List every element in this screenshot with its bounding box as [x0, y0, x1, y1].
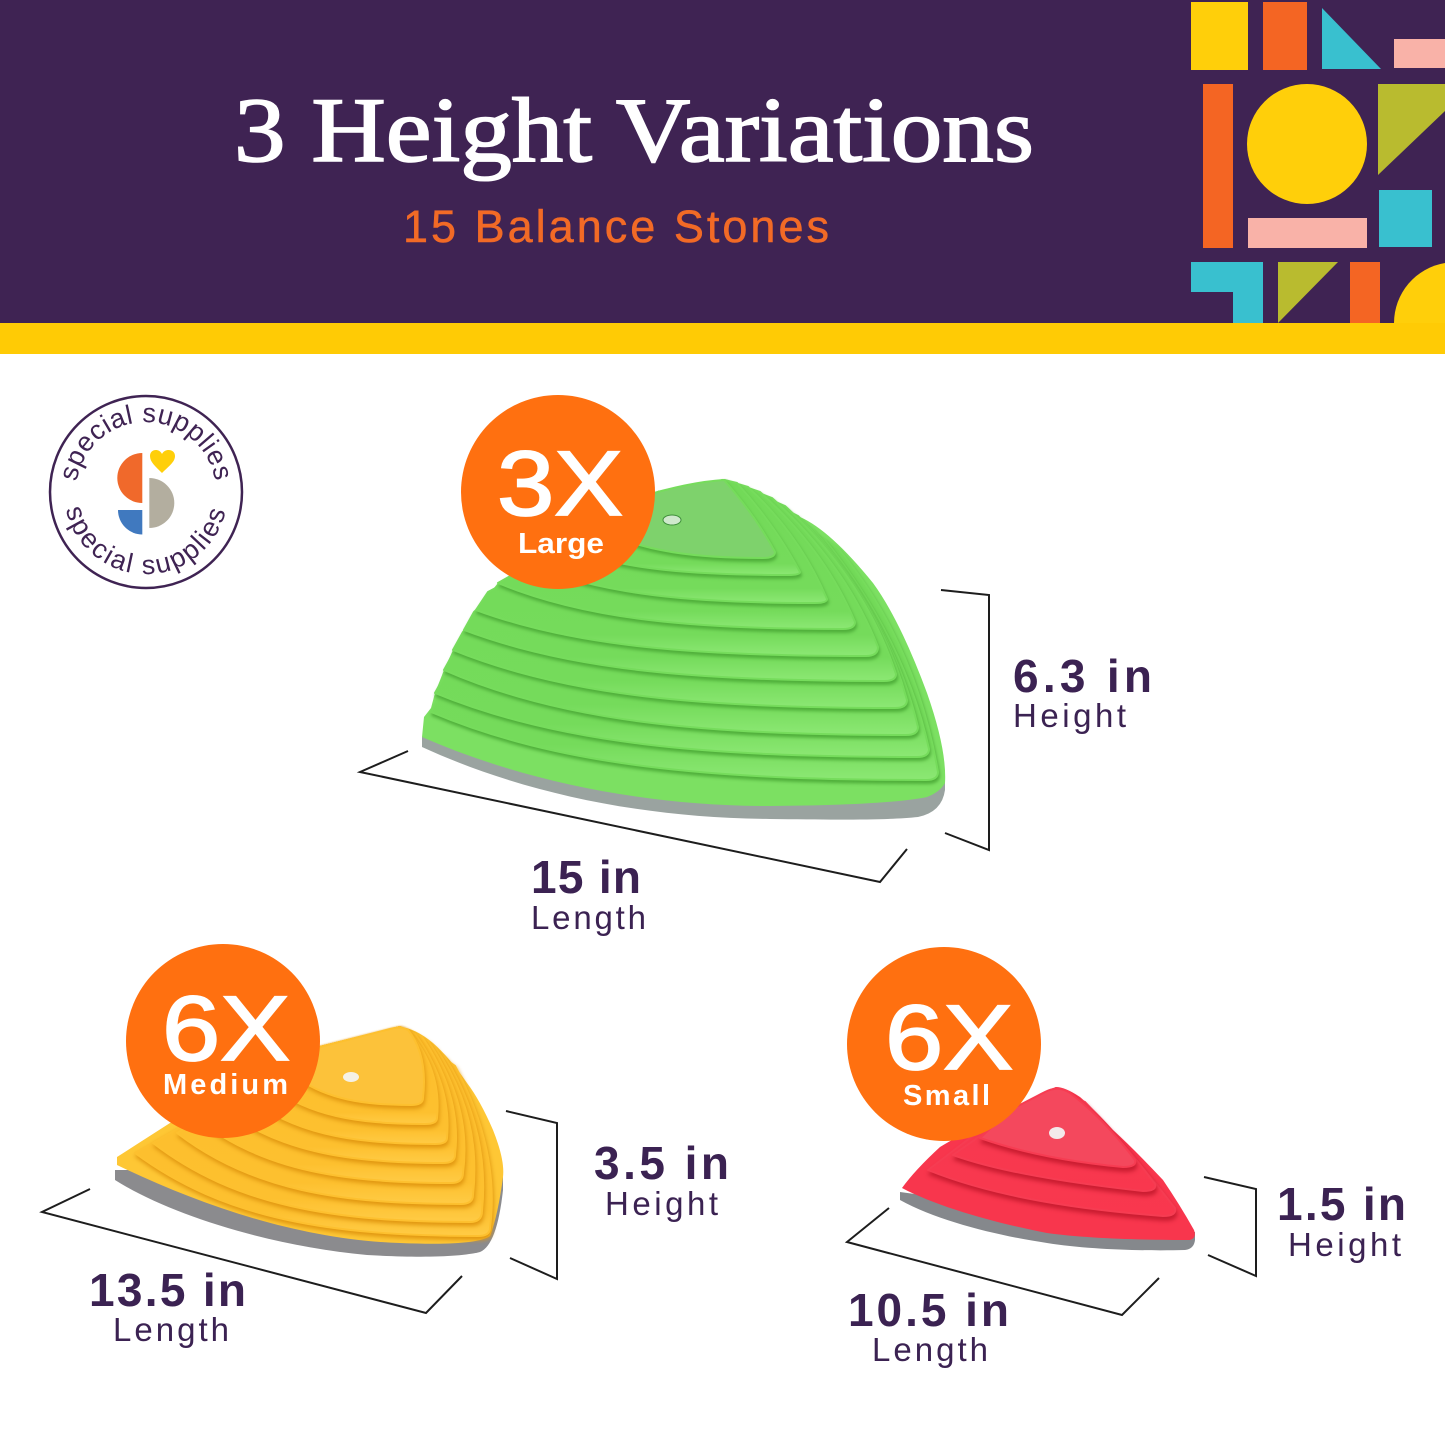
label: 6.3 in height — [1013, 650, 1152, 734]
label: 6.3 in height: 6.3 in — [1013, 650, 1152, 702]
small red stone — [900, 1087, 1195, 1250]
label: 15 in length — [531, 851, 646, 936]
label: 13.5 in length — [89, 1264, 246, 1348]
title: 3 Height Variations — [234, 79, 1034, 181]
badge: 3X large: Large — [518, 528, 604, 560]
badge: 3X large: 3X — [497, 433, 623, 535]
label: 13.5 in length: 13.5 in — [89, 1264, 246, 1316]
height bracket: medium — [506, 1111, 557, 1279]
label: 13.5 in length: Length — [113, 1311, 229, 1348]
logo: special supplies: special supplies — [66, 507, 225, 574]
badge: 6X small: Small — [903, 1080, 990, 1112]
header band — [0, 0, 1445, 354]
label: 1.5 in height: 1.5 in — [1277, 1178, 1406, 1230]
badge: 6X medium — [126, 944, 320, 1138]
badge: 6X medium: 6X — [162, 978, 290, 1080]
medium yellow stone — [115, 1027, 503, 1257]
length bracket: large — [360, 751, 907, 882]
height bracket: small — [1204, 1177, 1256, 1276]
badge: 6X medium: Medium — [163, 1069, 288, 1101]
badge: 6X small: 6X — [885, 987, 1013, 1089]
large green stone — [422, 480, 945, 820]
label: 1.5 in height — [1277, 1178, 1406, 1263]
length bracket: medium — [42, 1189, 462, 1313]
length bracket: small — [847, 1208, 1159, 1315]
height bracket: large — [941, 590, 989, 850]
badge: 6X small — [847, 947, 1041, 1141]
label: 15 in length: 15 in — [531, 851, 641, 903]
label: 10.5 in length: Length — [872, 1331, 988, 1368]
subtitle: 15 Balance Stones — [403, 201, 829, 252]
label: 6.3 in height: Height — [1013, 697, 1126, 734]
label: 10.5 in length — [848, 1284, 1009, 1368]
geometric shapes pattern — [1191, 2, 1445, 323]
label: 15 in length: Length — [531, 899, 646, 936]
label: 3.5 in height: 3.5 in — [594, 1137, 729, 1189]
logo: special supplies — [48, 394, 244, 590]
label: 3.5 in height — [594, 1137, 729, 1222]
label: 3.5 in height: Height — [605, 1185, 718, 1222]
label: 1.5 in height: Height — [1288, 1226, 1401, 1263]
badge: 3X large — [461, 395, 655, 589]
logo: special supplies: special supplies — [64, 404, 228, 480]
label: 10.5 in length: 10.5 in — [848, 1284, 1009, 1336]
